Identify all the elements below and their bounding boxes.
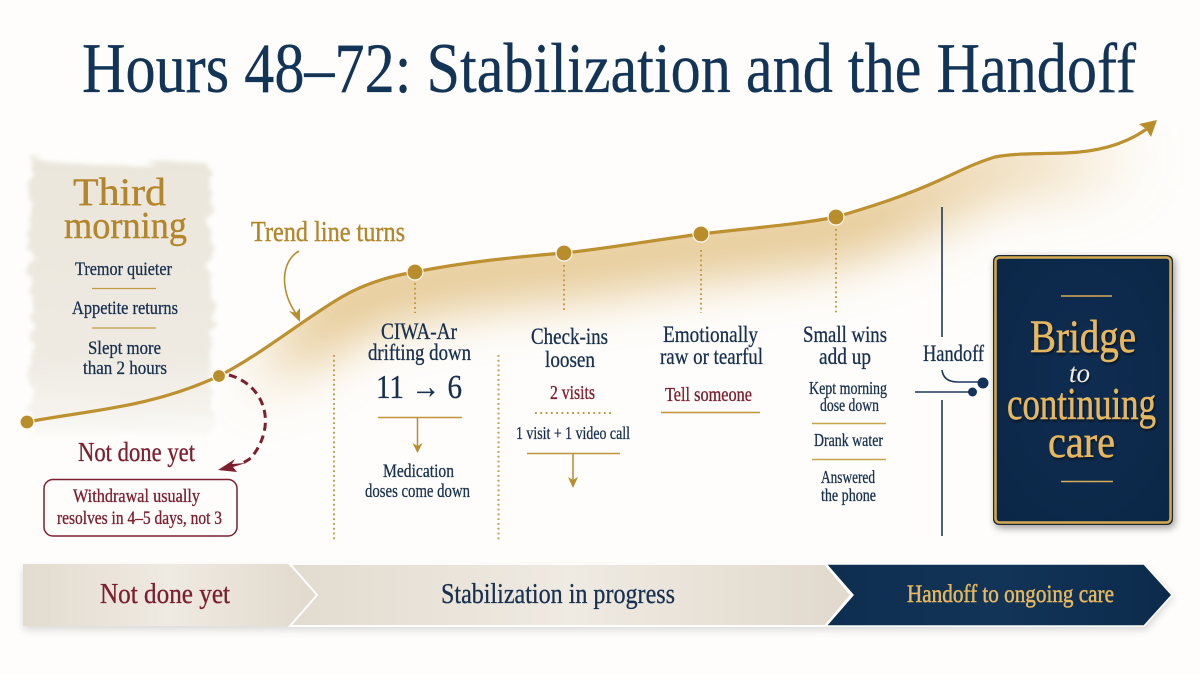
phase: not done yet: Not done yet	[100, 579, 230, 610]
markers	[20, 209, 844, 429]
column: small wins: Drank water	[814, 430, 883, 450]
panel: third morning	[31, 160, 211, 436]
column: small wins: Small wins	[803, 322, 887, 347]
list: morning signs: than 2 hours	[83, 359, 167, 379]
column: check-ins: 2 visits	[550, 383, 595, 404]
heading: third morning: morning	[64, 205, 187, 247]
column: check-ins: loosen	[545, 347, 595, 372]
column: CIWA-Ar: Medication	[383, 462, 454, 482]
column: CIWA-Ar	[365, 319, 471, 502]
phase: not done yet	[23, 564, 315, 626]
phase: stabilization in progress	[290, 564, 851, 626]
arrow: down	[412, 418, 422, 453]
arrow: down	[568, 454, 578, 488]
label: trend line turns: Trend line turns	[251, 217, 405, 248]
trend area glow	[240, 140, 1150, 372]
column: check-ins	[516, 324, 630, 488]
callout: withdrawal	[44, 480, 237, 536]
column: CIWA-Ar: doses come down	[365, 482, 470, 502]
arrow: dashed to not done yet	[218, 375, 265, 472]
heading: third morning: Third	[73, 171, 167, 214]
icon: handoff connector	[915, 370, 988, 396]
column: emotionally raw: raw or tearful	[660, 344, 763, 369]
card text: Bridge	[1030, 311, 1136, 363]
column: small wins: Kept morning	[809, 378, 887, 398]
list: morning signs: Slept more	[88, 339, 161, 359]
column: CIWA-Ar: drifting down	[368, 340, 471, 365]
card: bridge to continuing care	[993, 255, 1175, 528]
column: CIWA-Ar: CIWA-Ar	[381, 319, 457, 344]
list: morning signs: Appetite returns	[72, 299, 178, 319]
dotted connectors	[334, 229, 836, 542]
label: handoff: Handoff	[923, 341, 984, 366]
score change: 11 → 6	[376, 369, 462, 406]
callout: withdrawal: Withdrawal usually	[73, 487, 201, 507]
column: small wins: Answered	[821, 467, 875, 487]
phase: handoff to ongoing care: Handoff to ongoing care	[907, 581, 1114, 608]
card text: continuing	[1007, 379, 1156, 429]
callout: withdrawal: resolves in 4–5 days, not 3	[57, 509, 222, 529]
column: emotionally raw: Emotionally	[663, 322, 758, 347]
card text: care	[1048, 417, 1115, 467]
phase bar	[23, 564, 1174, 630]
column: emotionally raw: Tell someone	[665, 385, 752, 406]
handoff divider	[915, 207, 988, 536]
column: small wins: the phone	[821, 485, 876, 505]
phase: handoff to ongoing care	[826, 564, 1172, 626]
column: check-ins: Check-ins	[531, 324, 608, 349]
column: small wins: dose down	[820, 395, 879, 415]
list: morning signs	[72, 260, 178, 379]
arrowhead: trend end	[1139, 120, 1157, 137]
column: check-ins: 1 visit + 1 video call	[516, 423, 630, 443]
card text	[1007, 311, 1156, 467]
column: small wins	[803, 322, 887, 505]
column: emotionally raw	[660, 322, 763, 412]
column: small wins: add up	[819, 344, 871, 369]
arrow: trend line turns	[284, 251, 300, 322]
trend line chart	[20, 120, 1157, 429]
phase: stabilization in progress: Stabilization in progress	[441, 579, 675, 610]
label: not done yet: Not done yet	[78, 437, 195, 467]
heading: third morning	[64, 171, 187, 247]
list: morning signs: Tremor quieter	[75, 260, 172, 280]
card text: to	[1069, 358, 1090, 388]
